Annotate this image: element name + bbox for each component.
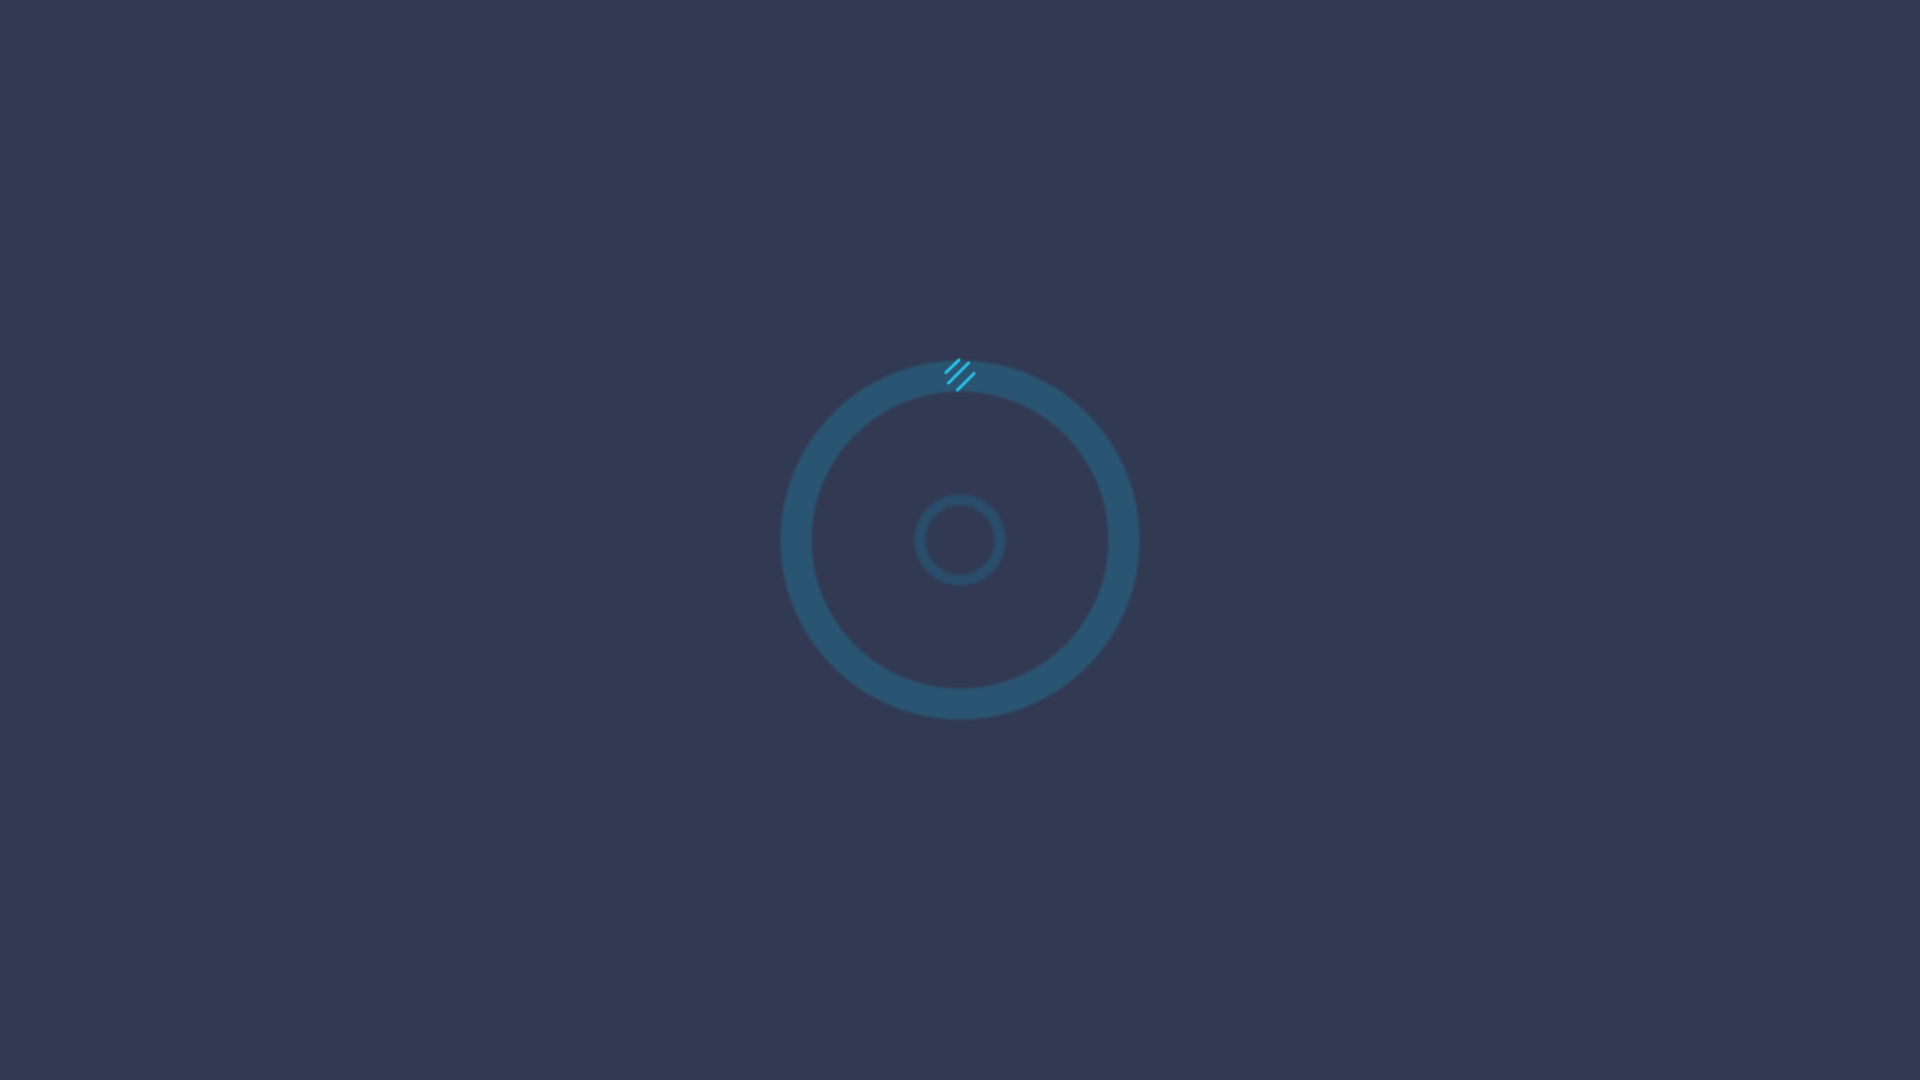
inner ring	[920, 500, 1000, 580]
icon: hatch marks	[946, 360, 974, 390]
outer ring	[796, 376, 1124, 704]
